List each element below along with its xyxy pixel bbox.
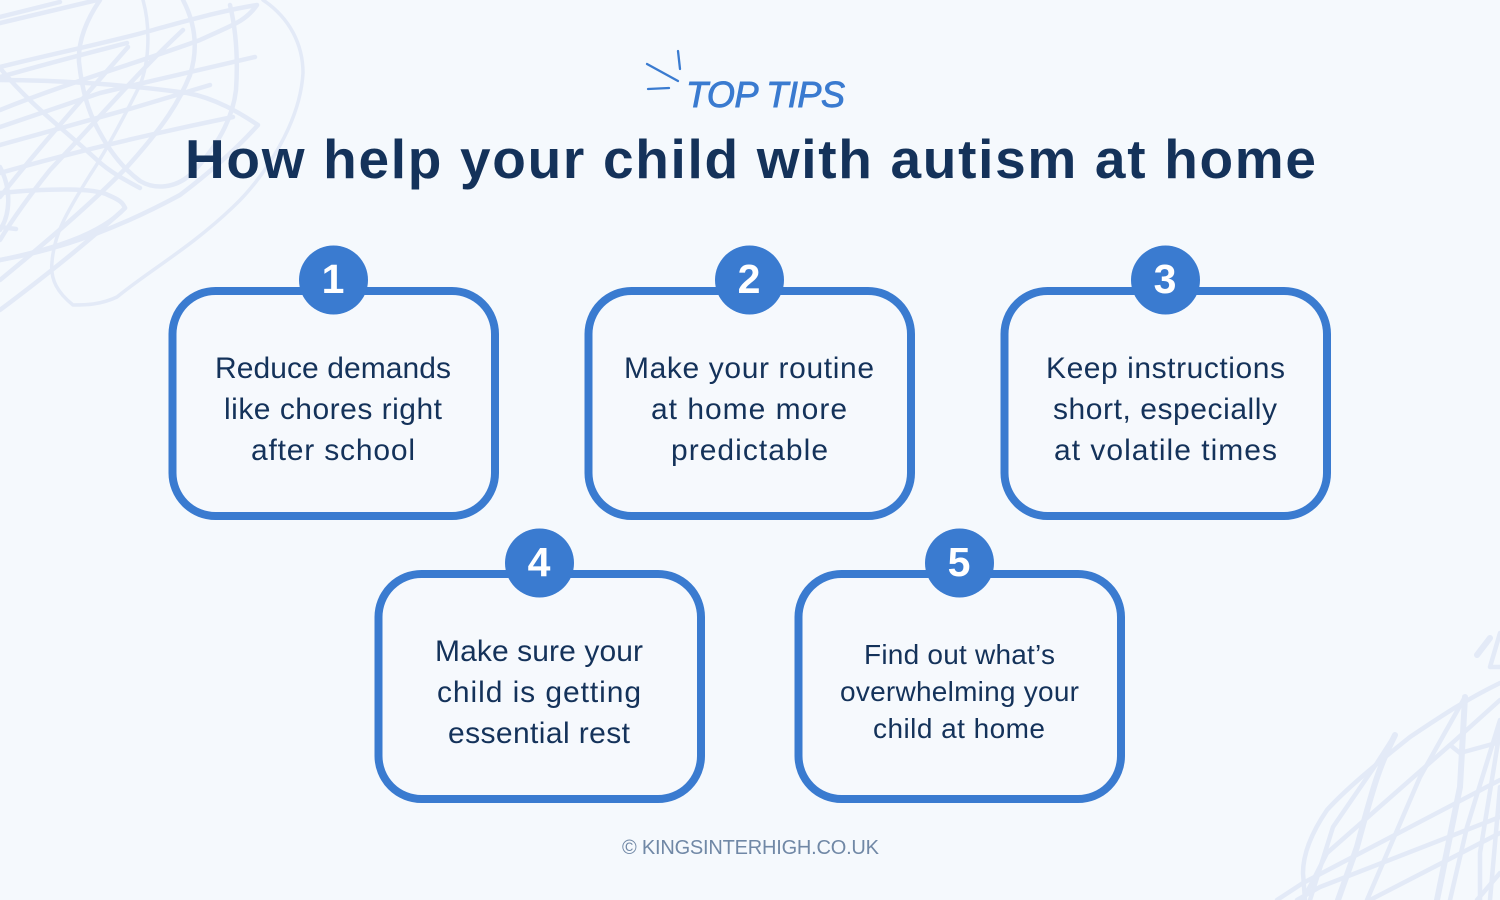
text 1: like chores right — [224, 393, 443, 426]
badge 2 — [715, 246, 784, 314]
card 2 — [588, 246, 911, 516]
text 4: child is getting — [437, 676, 641, 709]
badge 4 — [505, 528, 574, 598]
text 1: after school — [251, 434, 415, 467]
eyebrow: top tips: TOP TIPS — [686, 74, 845, 115]
text 2: predictable — [671, 434, 828, 467]
badge 3: 3 — [1154, 256, 1176, 302]
badge 2: 2 — [738, 256, 760, 302]
title: How help your child with autism at home — [185, 128, 1316, 190]
text 1 — [215, 352, 451, 467]
scribble: top-left decoration — [0, 0, 303, 310]
card 3 — [1004, 246, 1327, 516]
text 4: essential rest — [448, 717, 631, 750]
text 4: Make sure your — [435, 635, 643, 668]
text 2: at home more — [651, 393, 847, 426]
footer credit: © KINGSINTERHIGH.CO.UK — [622, 837, 880, 859]
text 5 — [840, 639, 1079, 744]
text 2: Make your routine — [624, 352, 874, 385]
text 4 — [435, 635, 643, 750]
badge 4: 4 — [528, 539, 551, 585]
scribble: bottom-right decoration — [1277, 633, 1500, 900]
text 1: Reduce demands — [215, 352, 451, 385]
badge 1 — [299, 246, 368, 314]
text 5: overwhelming your — [840, 676, 1079, 707]
text 3: at volatile times — [1054, 434, 1277, 467]
card 5 — [798, 528, 1121, 799]
text 2 — [624, 352, 874, 467]
text 5: child at home — [873, 713, 1045, 744]
badge 3 — [1131, 246, 1200, 314]
text 5: Find out what’s — [864, 639, 1055, 670]
badge 1: 1 — [322, 256, 344, 302]
badge 5 — [925, 528, 994, 598]
card 1 — [172, 246, 495, 516]
icon: spark marks — [647, 51, 680, 89]
text 3: Keep instructions — [1046, 352, 1285, 385]
text 3: short, especially — [1053, 393, 1277, 426]
badge 5: 5 — [948, 539, 970, 585]
card 4 — [378, 528, 701, 799]
text 3 — [1046, 352, 1285, 467]
